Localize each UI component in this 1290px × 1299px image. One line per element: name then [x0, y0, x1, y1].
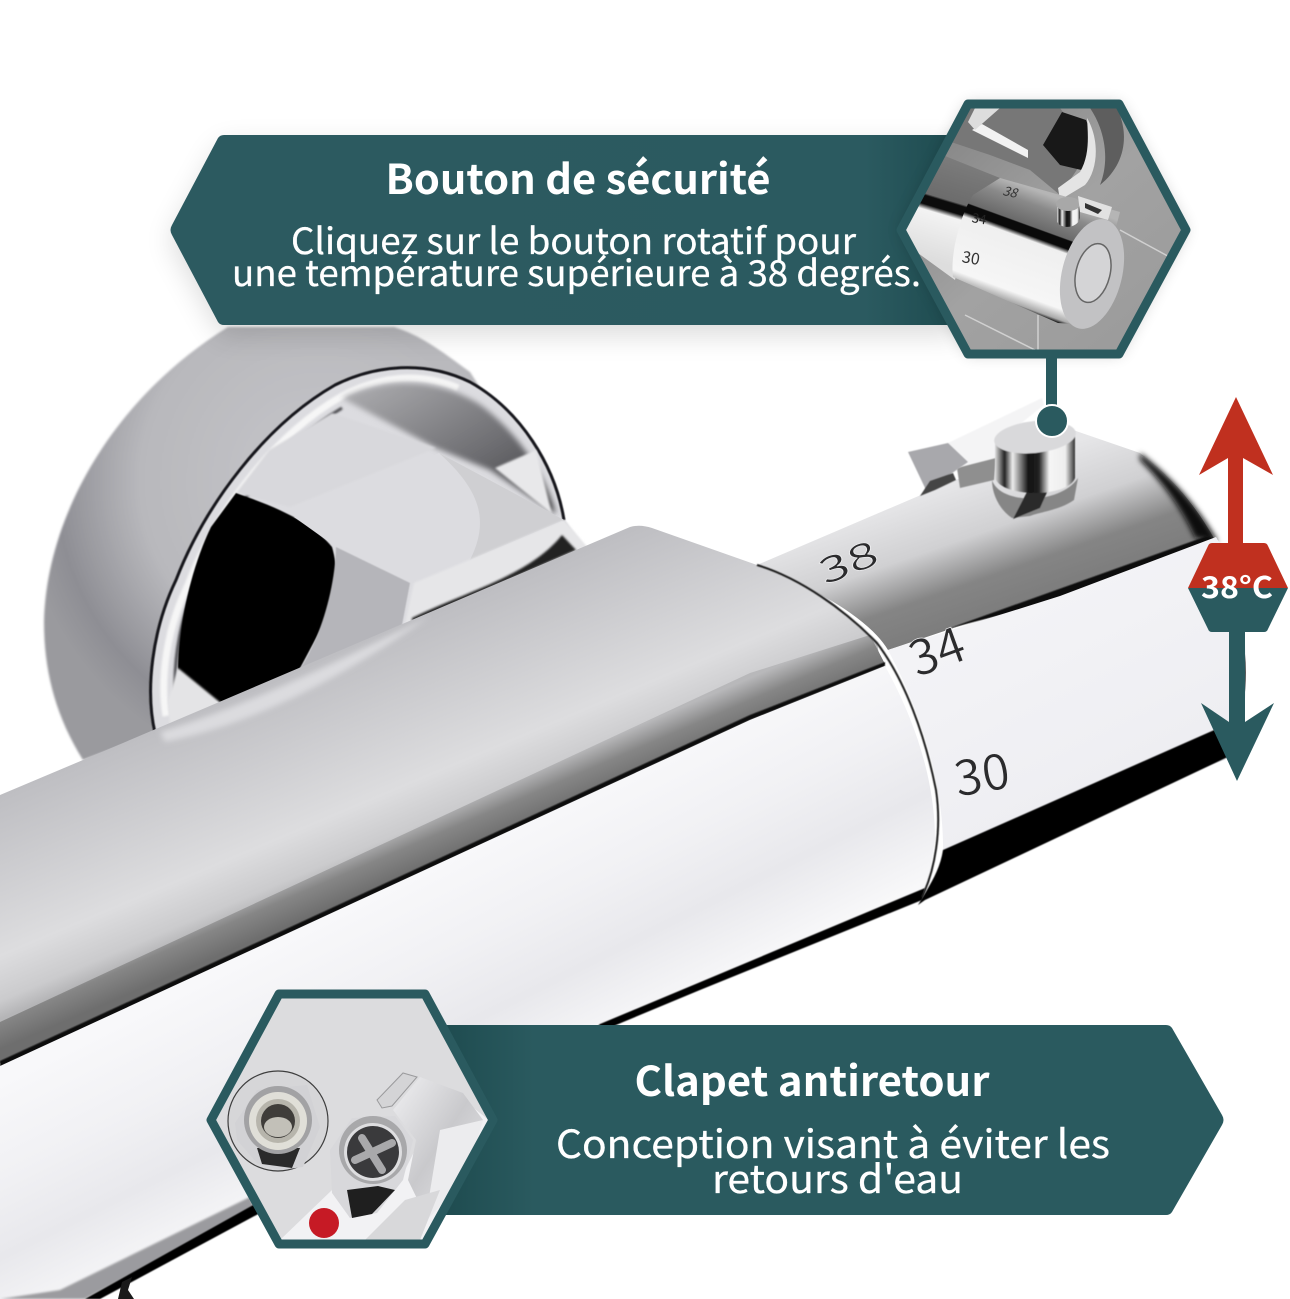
lower body dark edge [0, 888, 925, 1299]
dial dark ridge [950, 536, 1218, 628]
bottom callout heading: Clapet antiretour [634, 1048, 990, 1108]
inset hexagon frame [211, 994, 493, 1244]
inset: dial numbers [962, 186, 1018, 264]
dial face [888, 537, 1246, 860]
temperature dial top [757, 430, 1215, 650]
badge: 38 degrees [1188, 543, 1288, 632]
main body top face [0, 526, 880, 1063]
dial seam [757, 565, 938, 897]
inset: tile lines [965, 230, 1175, 352]
inset: valve dial [952, 178, 1120, 325]
top callout banner [170, 135, 970, 325]
inset: valve left section [906, 156, 1000, 280]
hexagonal wall fitting [168, 453, 588, 727]
body highlight strip [160, 616, 430, 742]
dial right edge [1241, 632, 1245, 705]
inset: dial numbers: 34 [971, 207, 988, 228]
inset: white valve body [282, 1109, 488, 1240]
connector line and dot [1036, 358, 1068, 437]
inset: magnified filter circle [228, 1071, 328, 1171]
dial numbers: 30 [948, 731, 1015, 812]
inset: button [1057, 206, 1080, 227]
inset: lever [377, 1073, 417, 1108]
main body chamfer band [0, 635, 885, 1063]
bottom callout banner [440, 1025, 1224, 1215]
bottom callout description: retours d'eau [712, 1149, 963, 1205]
inset: wall fitting [952, 108, 1078, 194]
inset: red hot mark [309, 1208, 339, 1238]
thermostatic valve product photo [0, 327, 1246, 1299]
inset: dial numbers: 38 [1001, 180, 1021, 202]
dial numbers: 38 [810, 525, 885, 595]
panel shadow [170, 145, 960, 335]
dial lower black band [918, 727, 1232, 905]
dial numbers [810, 525, 1015, 812]
dial shoulder shadow [1140, 453, 1218, 542]
inset: dial numbers: 30 [960, 243, 982, 270]
arrow: temperature up [1199, 397, 1273, 546]
panel: bottom callout [440, 1025, 1224, 1215]
safety button lever [908, 398, 1044, 496]
panel: top callout [170, 135, 970, 335]
bottom callout description: Conception visant à éviter les [556, 1114, 1110, 1170]
wall disc [44, 327, 586, 760]
dial numbers: 34 [897, 605, 974, 692]
top callout description: une température supérieure à 38 degrés. [232, 245, 921, 297]
top callout description: Cliquez sur le bouton rotatif pour [291, 213, 857, 265]
hexagon inset: check valve close-up [205, 990, 500, 1250]
arrow: temperature down [1201, 630, 1274, 781]
hexagon inset: safety button close-up [895, 100, 1195, 360]
main body lower face [0, 666, 935, 1299]
badge: 38 degrees: 38°C [1201, 563, 1273, 607]
top callout heading: Bouton de sécurité [386, 146, 770, 206]
inset: end cap [1060, 219, 1124, 329]
inset: inlet nut [332, 1168, 406, 1218]
inset hexagon frame [901, 104, 1186, 354]
safety button knob [992, 417, 1078, 519]
